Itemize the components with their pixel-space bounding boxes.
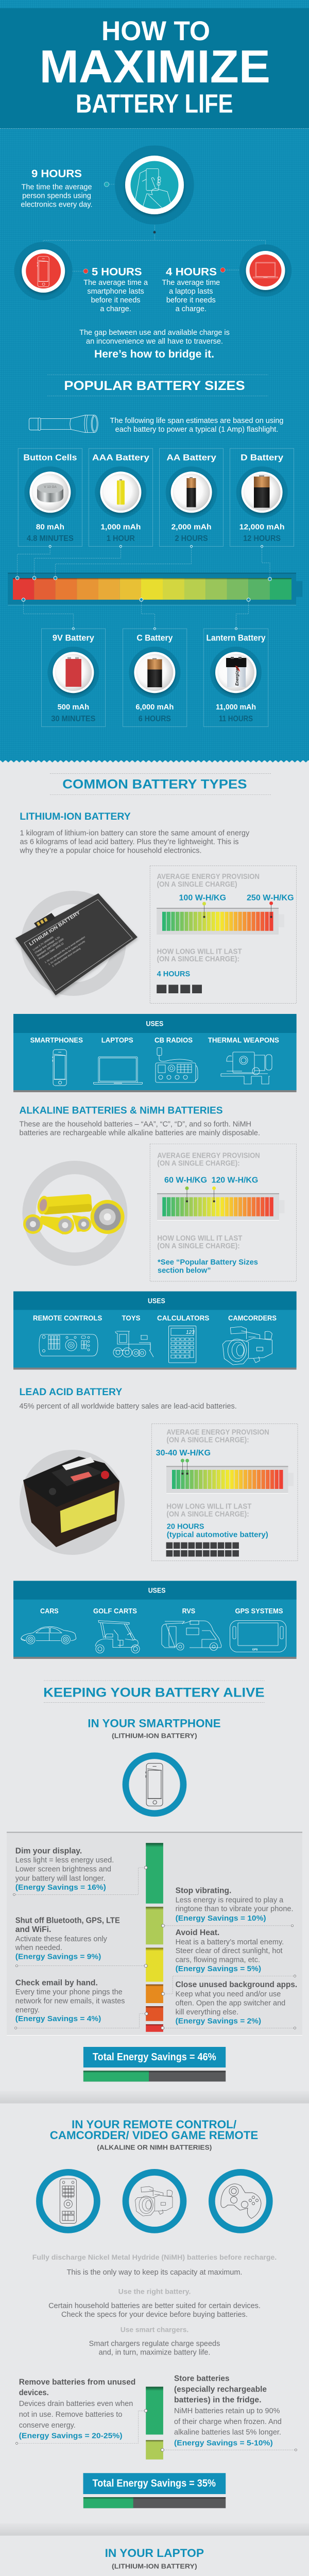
panel: alkaline energy stats: HOW LONG WILL IT LAST bbox=[157, 1234, 242, 1243]
total savings: remote 35%: Total Energy Savings = 35% bbox=[93, 2478, 216, 2489]
flashlight note: each battery to power a typical (1 Amp) flashlight. bbox=[115, 426, 278, 434]
lithium-ion heading and description bbox=[20, 811, 250, 855]
card: AAA battery: 1 HOUR bbox=[107, 534, 135, 543]
panel: alkaline energy stats: section below” bbox=[158, 1266, 211, 1275]
heading: in your laptop: (LITHIUM-ION BATTERY) bbox=[112, 2562, 197, 2570]
tip: check email by hand: (Energy Savings = 4%) bbox=[15, 2014, 101, 2023]
card: AAA battery: AAA Battery bbox=[92, 453, 149, 463]
tip: store in fridge bbox=[174, 2374, 282, 2447]
tip: avoid heat: cars, flowing magma, etc. bbox=[176, 1956, 260, 1964]
9 hours stat: The time the average bbox=[21, 183, 92, 192]
card: button cells: Button Cells bbox=[23, 453, 77, 463]
image: alkaline batteries bbox=[23, 1167, 125, 1259]
heading: remote control section: IN YOUR REMOTE CONTROL/ bbox=[72, 2118, 237, 2131]
tip: store in fridge: of their charge when frozen. And bbox=[174, 2418, 282, 2426]
heading: in your laptop bbox=[105, 2547, 204, 2570]
tip: store in fridge: batteries) in the fridge. bbox=[174, 2396, 262, 2404]
tip: remove batteries: not in use. Remove batteries to bbox=[19, 2411, 122, 2419]
image: lithium-ion battery: Li-ion 3.7V 1600mAh bbox=[32, 936, 54, 952]
tips: alkaline general advice: Fully discharge Nickel Metal Hydride (NiMH) batteries before recharge. bbox=[32, 2253, 277, 2261]
heading: keeping your battery alive bbox=[43, 1681, 265, 1702]
card: D battery: 12,000 mAh bbox=[239, 522, 285, 531]
panel: lithium-ion energy stats: 250 W-H/KG bbox=[247, 893, 294, 902]
tip: dim your display: your battery will last longer. bbox=[15, 1874, 106, 1883]
panel: alkaline uses bbox=[13, 1291, 297, 1369]
panel: alkaline energy stats: 60 W-H/KG bbox=[164, 1176, 207, 1185]
card: AA battery: 2 HOURS bbox=[175, 534, 208, 543]
9 hours stat: 9 HOURS bbox=[31, 168, 82, 180]
panel: alkaline uses: CAMCORDERS bbox=[228, 1314, 277, 1322]
icon: calculator bbox=[169, 1326, 196, 1363]
image: lithium-ion battery: 1. Do not approach the fire to avoid detonation bbox=[44, 936, 86, 963]
background: light grey content section bbox=[0, 760, 309, 2576]
card: lantern battery: 11,000 mAh bbox=[216, 703, 256, 711]
panel: alkaline uses: REMOTE CONTROLS bbox=[33, 1314, 102, 1322]
hour blocks bbox=[166, 1543, 239, 1556]
heading: in your smartphone: IN YOUR SMARTPHONE bbox=[88, 1717, 221, 1730]
panel: lithium-ion uses: THERMAL WEAPONS bbox=[208, 1036, 279, 1044]
card: D battery bbox=[230, 448, 294, 546]
total savings: smartphone 46% bbox=[83, 2047, 226, 2081]
panel: alkaline uses: USES bbox=[148, 1296, 165, 1304]
panel: lead acid uses: RVS bbox=[182, 1607, 195, 1615]
heading: in your smartphone bbox=[88, 1717, 221, 1740]
tip: store in fridge: NiMH batteries retain up to 90% bbox=[174, 2407, 280, 2415]
panel: lead acid uses: GOLF CARTS bbox=[93, 1607, 137, 1615]
panel: smartphone tips bbox=[7, 1832, 302, 2036]
panel: lead acid energy stats: 30-40 W-H/KG bbox=[156, 1449, 211, 1458]
icon: AAA battery bbox=[117, 479, 125, 505]
card: AA battery: AA Battery bbox=[166, 453, 216, 463]
panel: lead acid energy stats: AVERAGE ENERGY PROVISION bbox=[166, 1428, 269, 1436]
9 hours stat: person spends using bbox=[22, 192, 91, 200]
image: lithium-ion battery: Production Date: 2009.12 bbox=[38, 942, 64, 961]
total savings: smartphone 46%: Total Energy Savings = 46% bbox=[93, 2052, 216, 2063]
4 hours stat: a laptop lasts bbox=[169, 287, 213, 296]
panel: alkaline energy stats: AVERAGE ENERGY PROVISION bbox=[157, 1151, 260, 1160]
card: C battery: 6 HOURS bbox=[139, 715, 171, 723]
tip: shut off radios: when needed. bbox=[15, 1944, 62, 1952]
5 hours stat: smartphone lasts bbox=[87, 287, 144, 296]
tip: close background apps: kill everything else. bbox=[176, 2008, 238, 2016]
icon: golf cart bbox=[95, 1621, 140, 1653]
title: BATTERY LIFE bbox=[76, 89, 233, 118]
title: MAXIMIZE bbox=[39, 41, 270, 93]
lithium-ion heading and description: 1 kilogram of lithium-ion battery can store the same amount of energy bbox=[20, 829, 250, 838]
card: button cells: 80 mAh bbox=[36, 522, 64, 531]
tip: close background apps: (Energy Savings = 2%) bbox=[176, 2017, 261, 2026]
5 hours stat bbox=[83, 266, 148, 313]
panel: lithium-ion energy stats: HOW LONG WILL IT LAST bbox=[157, 947, 242, 956]
tip: close background apps bbox=[176, 1980, 297, 2026]
hour blocks bbox=[157, 985, 202, 993]
4 hours stat: The average time bbox=[162, 279, 220, 287]
tip: stop vibrating: Less energy is required to play a bbox=[176, 1896, 284, 1904]
tip: avoid heat: Avoid Heat. bbox=[176, 1928, 219, 1937]
card: D battery: D Battery bbox=[241, 453, 284, 463]
image: lithium-ion battery bbox=[15, 893, 138, 995]
heading: common battery types: COMMON BATTERY TYPES bbox=[62, 777, 247, 792]
panel: lead acid energy stats: (typical automotive battery) bbox=[167, 1531, 268, 1539]
tip: remove batteries: (Energy Savings = 20-25%) bbox=[19, 2432, 123, 2441]
image: lead acid battery bbox=[20, 1450, 125, 1555]
tips: alkaline general advice bbox=[32, 2253, 277, 2357]
icon: ring with game controller bbox=[212, 2172, 269, 2230]
tip: dim your display: Lower screen brightness and bbox=[15, 1866, 111, 1874]
9 hours stat bbox=[21, 168, 93, 209]
panel: lead acid energy stats: (ON A SINGLE CHARGE): bbox=[166, 1435, 249, 1445]
panel: alkaline energy stats: *See “Popular Battery Sizes bbox=[158, 1258, 258, 1266]
icon: hands using phone bbox=[115, 145, 194, 225]
tip: store in fridge: Store batteries bbox=[174, 2374, 230, 2383]
card: AA battery: 2,000 mAh bbox=[171, 522, 212, 531]
card: 9V battery bbox=[41, 629, 106, 726]
5 hours stat: a charge. bbox=[100, 305, 131, 313]
tips: alkaline general advice: This is the only way to keep its capacity at maximum. bbox=[67, 2268, 242, 2277]
panel: lithium-ion energy stats bbox=[150, 866, 297, 1003]
tip: store in fridge: (especially rechargeable bbox=[174, 2385, 267, 2394]
lithium-ion heading and description: as 6 kilograms of lead acid battery. Plus they’re lightweight. This is bbox=[20, 838, 239, 846]
icon: button cell battery: V 13 GA bbox=[44, 485, 57, 489]
tip: remove batteries: devices. bbox=[19, 2388, 49, 2397]
alkaline heading and description: ALKALINE BATTERIES & NiMH BATTERIES bbox=[20, 1105, 222, 1116]
background: top teal section bbox=[0, 0, 309, 761]
panel: lithium-ion uses: LAPTOPS bbox=[101, 1036, 133, 1044]
card: 9V battery: 30 MINUTES bbox=[51, 715, 95, 723]
tip: store in fridge: (Energy Savings = 5-10%) bbox=[174, 2439, 273, 2447]
panel: alkaline uses: TOYS bbox=[122, 1314, 140, 1322]
panel: alkaline uses: CALCULATORS bbox=[157, 1314, 209, 1322]
tip: shut off radios: (Energy Savings = 9%) bbox=[15, 1953, 101, 1961]
tip: avoid heat: Steer clear of direct sunlight, hot bbox=[176, 1947, 283, 1955]
tips: alkaline general advice: and, in turn, maximize battery life. bbox=[99, 2348, 210, 2357]
panel: lead acid uses: USES bbox=[148, 1586, 165, 1595]
image: lithium-ion battery: LITHIUM ION BATTERY bbox=[28, 910, 82, 947]
card: AAA battery: 1,000 mAh bbox=[100, 522, 141, 531]
gap text: an inconvenience we all have to traverse. bbox=[86, 337, 223, 346]
icon: 9V battery bbox=[65, 657, 81, 687]
energy gauge bbox=[166, 1459, 294, 1494]
tip: remove batteries: conserve energy. bbox=[19, 2421, 76, 2430]
tip: dim your display bbox=[15, 1846, 114, 1892]
4 hours stat bbox=[162, 266, 220, 313]
panel: lead acid uses bbox=[13, 1581, 297, 1659]
lithium-ion heading and description: LITHIUM-ION BATTERY bbox=[20, 811, 131, 822]
5 hours stat: 5 HOURS bbox=[92, 266, 142, 278]
tip: avoid heat bbox=[176, 1928, 284, 1973]
tip: remove batteries bbox=[19, 2378, 135, 2441]
image: lithium-ion battery: Charge limit voltage: 4.2V bbox=[35, 936, 61, 955]
icon: GPS device: GPS bbox=[252, 1649, 258, 1652]
4 hours stat: before it needs bbox=[166, 296, 216, 304]
card: AAA battery bbox=[89, 448, 153, 546]
flashlight note bbox=[110, 417, 283, 434]
tip: close background apps: Keep what you need and/or use bbox=[176, 1990, 281, 1998]
tip: stop vibrating bbox=[176, 1887, 294, 1923]
lead acid heading and description: 45% percent of all worldwide battery sales are lead-acid batteries. bbox=[20, 1402, 237, 1411]
tip: dim your display: Dim your display. bbox=[15, 1846, 82, 1855]
tip: remove batteries: Devices drain batteries even when bbox=[19, 2400, 133, 2408]
lithium-ion heading and description: why they’re a popular choice for household electronics. bbox=[20, 847, 202, 855]
tip: shut off radios: and WiFi. bbox=[15, 1925, 51, 1934]
gap text: The gap between use and available charge is bbox=[79, 329, 230, 337]
panel: lithium-ion energy stats: 4 HOURS bbox=[157, 970, 190, 978]
title: HOW TO bbox=[101, 16, 210, 46]
icon: lantern battery: Energizer bbox=[235, 667, 239, 686]
heading: common battery types bbox=[50, 773, 271, 794]
panel: lithium-ion energy stats: (ON A SINGLE CHARGE) bbox=[157, 880, 237, 889]
icon: smartphone bbox=[14, 242, 73, 300]
alkaline heading and description bbox=[20, 1105, 260, 1138]
flashlight note: The following life span estimates are based on using bbox=[110, 417, 283, 425]
icon: D battery bbox=[254, 475, 270, 508]
panel: lead acid energy stats: HOW LONG WILL IT LAST bbox=[166, 1502, 251, 1511]
capacity scale bar with connectors bbox=[8, 545, 302, 630]
heading: in your laptop: IN YOUR LAPTOP bbox=[105, 2547, 204, 2560]
heading: in your smartphone: (LITHIUM-ION BATTERY) bbox=[112, 1732, 197, 1740]
tip: check email by hand: Every time your phone pings the bbox=[15, 1988, 123, 1996]
tip: check email by hand: Check email by hand. bbox=[15, 1978, 98, 1987]
panel: lead acid energy stats: (ON A SINGLE CHARGE): bbox=[166, 1510, 249, 1518]
tips: alkaline general advice: Smart chargers regulate charge speeds bbox=[89, 2340, 220, 2348]
savings stacked column bbox=[146, 1843, 163, 2032]
icon: thermal weapon sight bbox=[221, 1052, 272, 1084]
tips: alkaline general advice: Check the specs for your device before buying batteries. bbox=[61, 2311, 248, 2319]
panel: lead acid uses: GPS SYSTEMS bbox=[235, 1607, 283, 1615]
icon: car bbox=[21, 1626, 76, 1644]
icon: toy train bbox=[113, 1331, 153, 1357]
tip: stop vibrating: ringtone than to vibrate your phone. bbox=[176, 1905, 294, 1913]
tip: shut off radios bbox=[15, 1917, 120, 1961]
tip: stop vibrating: (Energy Savings = 10%) bbox=[176, 1914, 266, 1923]
panel: lithium-ion uses: CB RADIOS bbox=[154, 1036, 193, 1044]
card: D battery: 12 HOURS bbox=[243, 534, 281, 543]
panel: lithium-ion energy stats: (ON A SINGLE CHARGE): bbox=[157, 955, 239, 963]
icon: ring with camcorder bbox=[126, 2172, 183, 2230]
icon: flashlight bbox=[29, 415, 98, 433]
icon: laptop bbox=[239, 244, 291, 297]
tips: alkaline general advice: Use the right battery. bbox=[118, 2288, 191, 2296]
card: 9V battery: 9V Battery bbox=[53, 633, 94, 643]
icon: C battery bbox=[147, 658, 162, 687]
lead acid heading and description bbox=[20, 1386, 237, 1411]
tip: avoid heat: Heat is a battery’s mortal enemy. bbox=[176, 1938, 284, 1946]
energy gauge bbox=[157, 902, 284, 935]
tips: alkaline general advice: Use smart chargers. bbox=[121, 2326, 188, 2334]
heading: popular battery sizes bbox=[47, 375, 268, 396]
icon: CB radio bbox=[156, 1048, 198, 1082]
icon: camcorder bbox=[222, 1327, 272, 1365]
icon: calculator: 123 bbox=[186, 1330, 195, 1335]
heading: remote control section: CAMCORDER/ VIDEO GAME REMOTE bbox=[50, 2129, 258, 2142]
tip: shut off radios: Activate these features only bbox=[15, 1935, 108, 1943]
panel: alkaline energy stats: 120 W-H/KG bbox=[212, 1176, 258, 1185]
tip: check email by hand bbox=[15, 1978, 125, 2023]
tip: avoid heat: (Energy Savings = 5%) bbox=[176, 1964, 261, 1973]
icon: lantern battery bbox=[226, 657, 246, 687]
gap text bbox=[79, 329, 230, 360]
heading: popular battery sizes: POPULAR BATTERY SIZES bbox=[64, 379, 245, 393]
panel: alkaline energy stats: (ON A SINGLE CHARGE): bbox=[157, 1242, 240, 1250]
tip: dim your display: Less light = less energy used. bbox=[15, 1856, 114, 1865]
tip: store in fridge: alkaline batteries last 5% longer. bbox=[174, 2429, 281, 2437]
icon: RV bbox=[162, 1621, 221, 1651]
4 hours stat: a charge. bbox=[176, 305, 207, 313]
9 hours stat: electronics every day. bbox=[21, 201, 93, 209]
panel: lead acid energy stats bbox=[151, 1424, 298, 1561]
energy gauge bbox=[157, 1187, 284, 1221]
icon: ring with remote bbox=[39, 2172, 97, 2230]
card: button cells: 4.8 MINUTES bbox=[27, 534, 74, 543]
total savings: remote 35% bbox=[83, 2473, 226, 2508]
alkaline heading and description: batteries are rechargeable while alkaline batteries are mainly disposable. bbox=[20, 1129, 260, 1138]
heading: remote control section: (ALKALINE OR NIMH BATTERIES) bbox=[97, 2144, 212, 2151]
card: lantern battery: Lantern Battery bbox=[206, 633, 266, 643]
gap text: Here’s how to bridge it. bbox=[94, 348, 214, 360]
heading: keeping your battery alive: KEEPING YOUR BATTERY ALIVE bbox=[43, 1685, 265, 1700]
tips: alkaline general advice: Certain household batteries are better suited for certain devices. bbox=[48, 2302, 261, 2310]
alkaline heading and description: These are the household batteries – “AA”, “C”, “D”, and so forth. NiMH bbox=[20, 1121, 251, 1129]
card: 9V battery: 500 mAh bbox=[58, 703, 89, 711]
card: button cells bbox=[18, 448, 82, 546]
icon: AA battery bbox=[186, 477, 196, 507]
card: AA battery bbox=[160, 448, 224, 546]
tip: remove batteries: Remove batteries from unused bbox=[19, 2378, 135, 2386]
panel: lead acid uses: CARS bbox=[40, 1607, 59, 1615]
tip: check email by hand: network for new emails, it wastes bbox=[15, 1997, 125, 2005]
5 hours stat: The average time a bbox=[83, 279, 148, 287]
card: lantern battery bbox=[203, 629, 268, 726]
image: lithium-ion battery: 2. Do not disassemble the battery security bbox=[48, 940, 86, 965]
tip: close background apps: Close unused background apps. bbox=[176, 1980, 297, 1989]
panel: lead acid energy stats: 20 HOURS bbox=[167, 1522, 204, 1531]
5 hours stat: before it needs bbox=[91, 296, 141, 304]
icon: ring with smartphone bbox=[126, 1756, 183, 1814]
savings stacked column: remote bbox=[15, 2387, 297, 2460]
icon: button cell battery bbox=[37, 483, 63, 502]
icon: laptop bbox=[94, 1057, 142, 1084]
heading: remote control section bbox=[50, 2118, 258, 2151]
4 hours stat: 4 HOURS bbox=[166, 266, 217, 278]
card: C battery bbox=[123, 629, 187, 726]
title bbox=[39, 16, 270, 118]
panel: lithium-ion uses bbox=[13, 1014, 297, 1092]
panel: lithium-ion energy stats: AVERAGE ENERGY PROVISION bbox=[157, 872, 260, 881]
image: lithium-ion battery: 3. Strictly prohibit short circuiting bbox=[52, 947, 81, 968]
card: C battery: C Battery bbox=[136, 633, 173, 643]
tip: stop vibrating: Stop vibrating. bbox=[176, 1887, 231, 1895]
lead acid heading and description: LEAD ACID BATTERY bbox=[20, 1386, 122, 1398]
card: C battery: 6,000 mAh bbox=[135, 703, 174, 711]
icon: remote control bbox=[39, 1334, 98, 1356]
icon: smartphone bbox=[53, 1049, 66, 1086]
usage stats tree bbox=[14, 145, 291, 313]
tip: close background apps: often. Open the app switcher and bbox=[176, 1999, 285, 2007]
icon: GPS device bbox=[230, 1621, 286, 1652]
image: lithium-ion battery: Standard: GB/T18287-2000 bbox=[36, 938, 64, 958]
card: lantern battery: 11 HOURS bbox=[219, 715, 253, 723]
panel: alkaline energy stats bbox=[150, 1144, 297, 1281]
panel: lithium-ion uses: USES bbox=[146, 1020, 163, 1028]
panel: alkaline energy stats: (ON A SINGLE CHARGE): bbox=[157, 1159, 240, 1167]
title banner bbox=[0, 8, 309, 128]
tip: dim your display: (Energy Savings = 16%) bbox=[15, 1883, 106, 1892]
panel: lithium-ion energy stats: 100 W-H/KG bbox=[179, 893, 226, 902]
tip: check email by hand: energy. bbox=[15, 2006, 40, 2014]
panel: lithium-ion uses: SMARTPHONES bbox=[30, 1036, 83, 1044]
tip: shut off radios: Shut off Bluetooth, GPS, LTE bbox=[15, 1917, 120, 1925]
